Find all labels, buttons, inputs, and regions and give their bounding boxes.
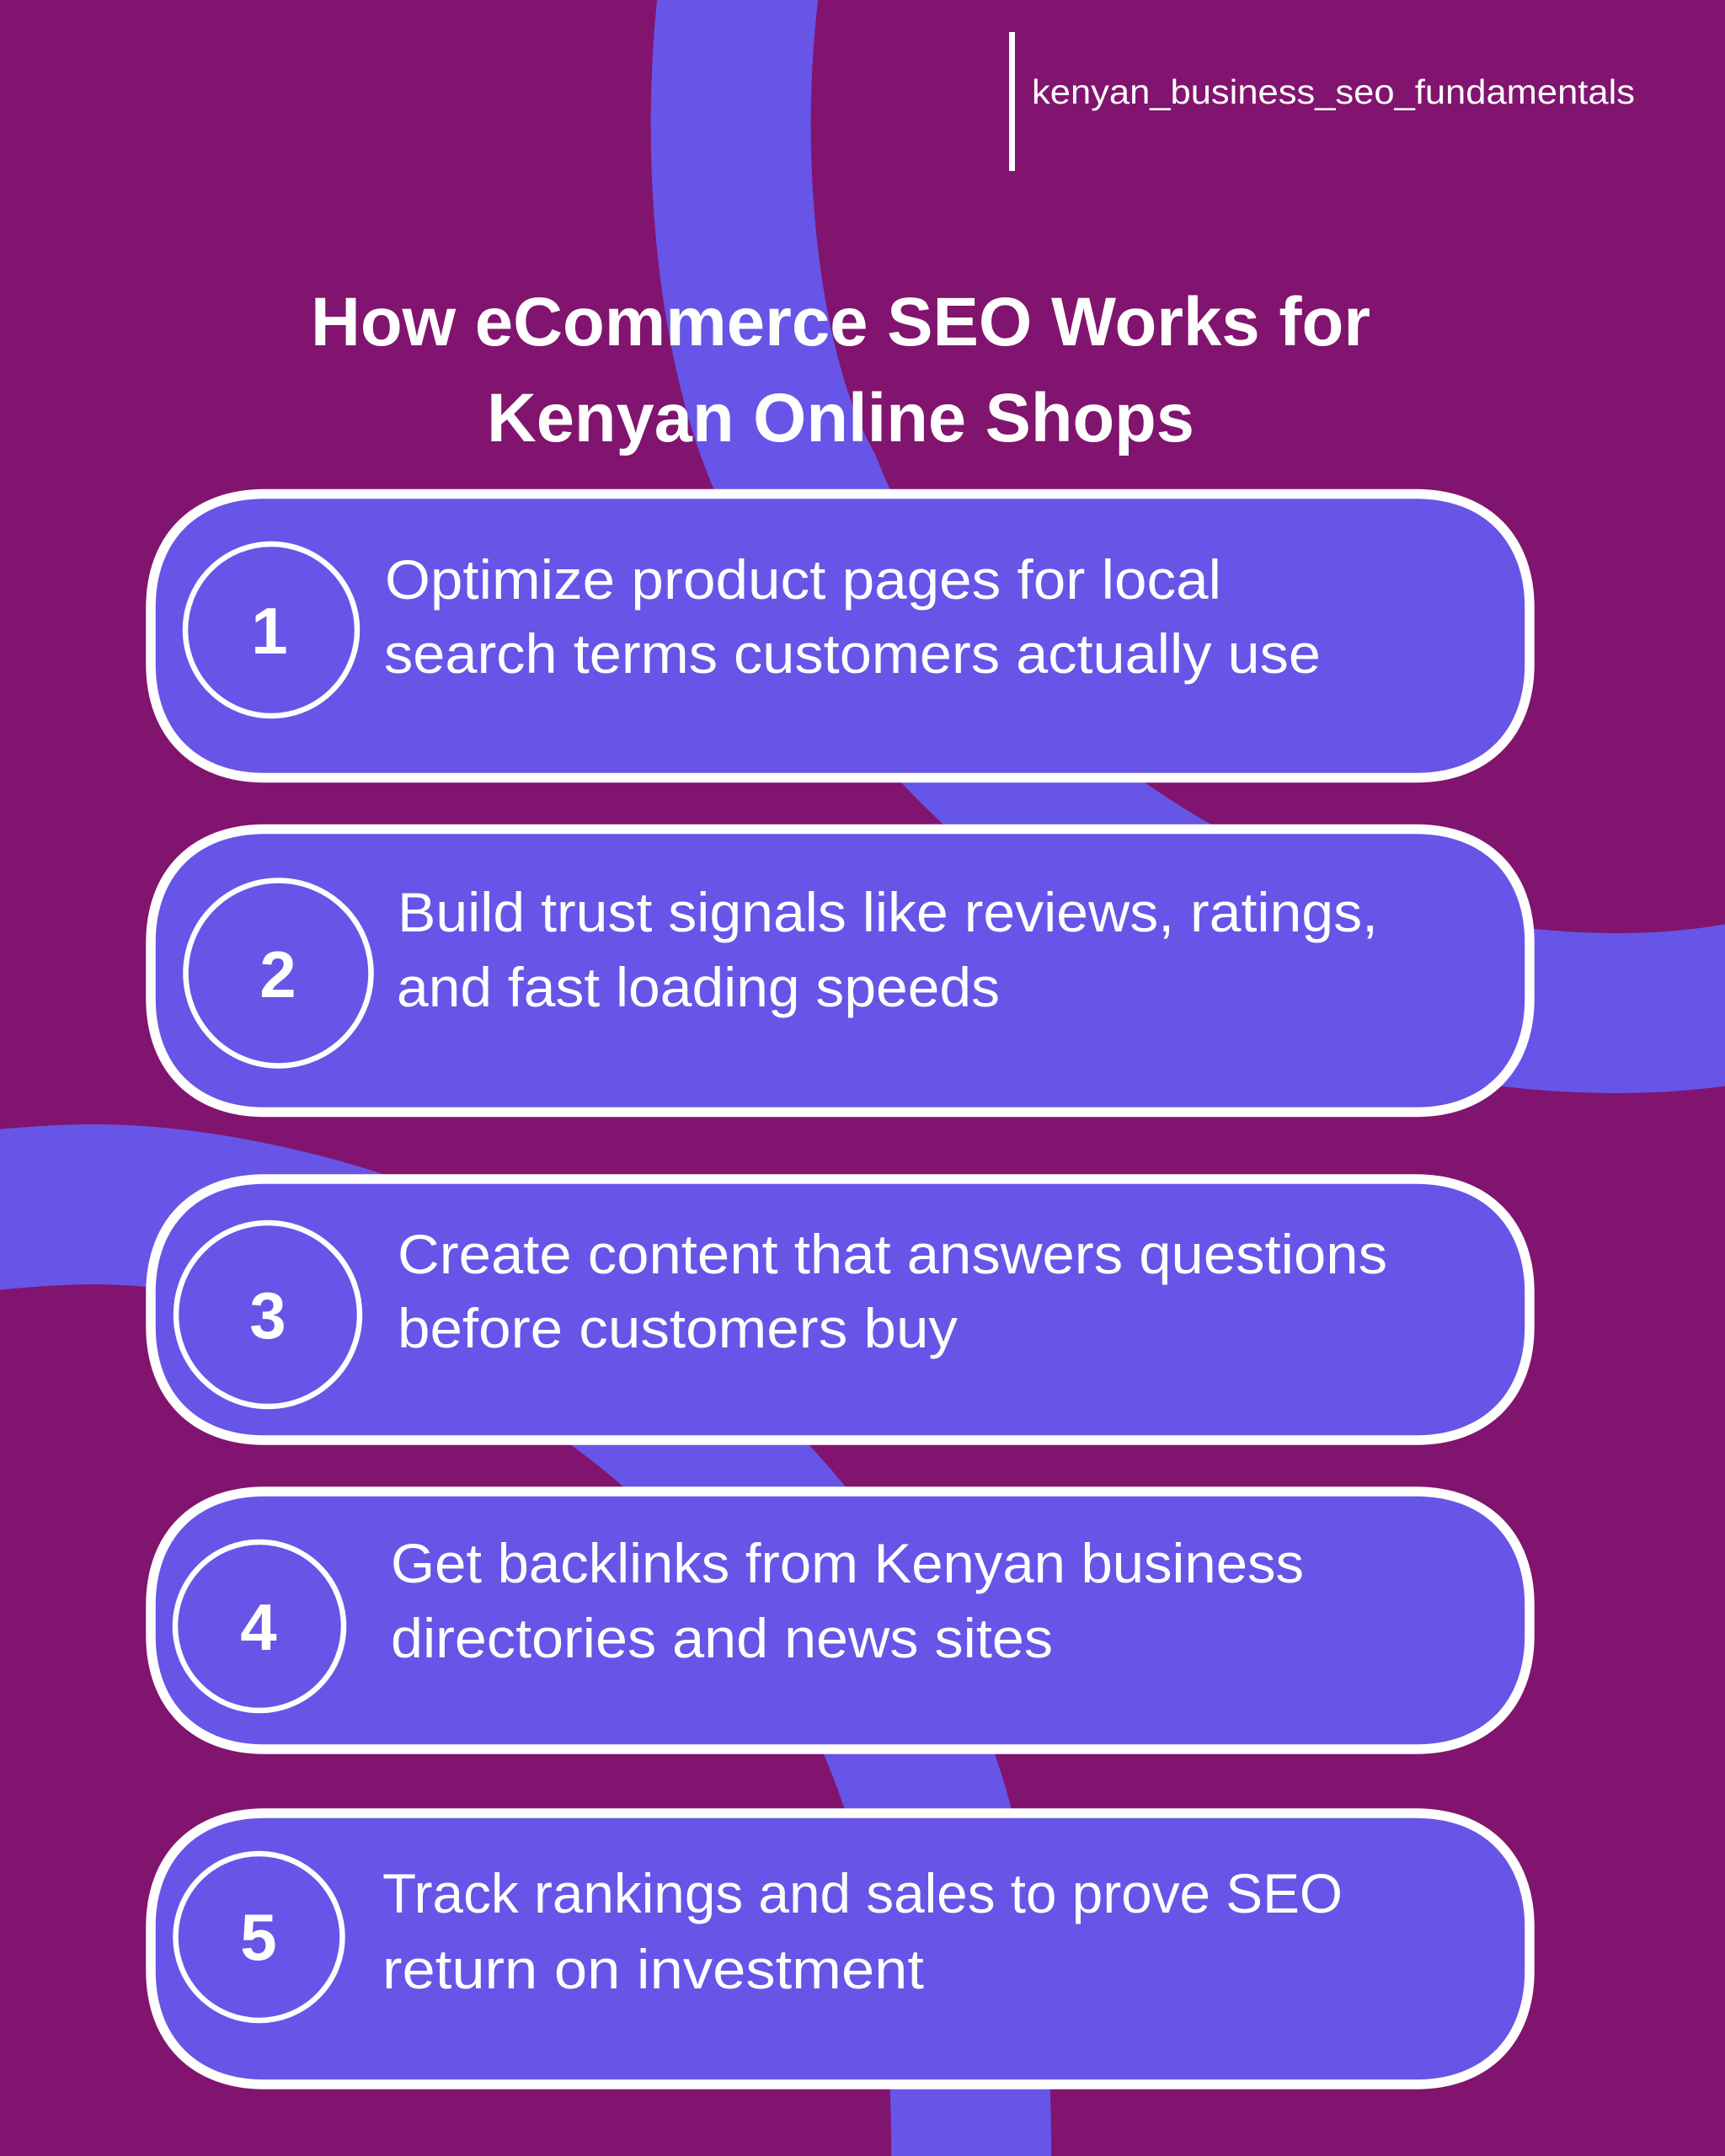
title: How eCommerce SEO Works for (311, 284, 1370, 360)
lower background ribbon (0, 1204, 971, 2156)
step 1 text: Optimize product pages for local (385, 548, 1221, 611)
step 3 text: Create content that answers questions (398, 1223, 1387, 1285)
step 1 number badge (185, 544, 357, 716)
title: Kenyan Online Shops (487, 380, 1194, 456)
step 3 number badge (176, 1223, 360, 1406)
step 3 text (398, 1223, 1387, 1359)
step 5 number badge (175, 1854, 342, 2020)
step 3 number badge: 3 (249, 1278, 286, 1353)
step 4 number badge: 4 (240, 1590, 277, 1664)
step 2 text: Build trust signals like reviews, ratings, (398, 881, 1378, 943)
step 3 text: before customers buy (398, 1297, 958, 1359)
step 4 card (151, 1492, 1530, 1749)
step 4 text: Get backlinks from Kenyan business (391, 1532, 1304, 1594)
step 3 card (151, 1179, 1530, 1440)
step 5 card (151, 1813, 1530, 2084)
step 2 number badge (185, 881, 371, 1066)
step 5 text: return on investment (382, 1938, 924, 2000)
upper background ribbon (731, 0, 1725, 1013)
title (311, 284, 1370, 456)
account handle with divider (1009, 32, 1635, 171)
step 2 text (397, 881, 1378, 1018)
step 1 number badge: 1 (251, 594, 288, 668)
step 4 number badge (175, 1542, 344, 1710)
step 1 text (384, 548, 1321, 685)
step 5 number badge: 5 (240, 1900, 277, 1974)
step 1 text: search terms customers actually use (384, 622, 1321, 685)
step 4 text (391, 1532, 1304, 1669)
step 4 text: directories and news sites (391, 1607, 1053, 1669)
step 2 number badge: 2 (259, 937, 296, 1011)
account handle with divider: kenyan_business_seo_fundamentals (1032, 72, 1635, 111)
step 2 text: and fast loading speeds (397, 956, 1000, 1018)
step 5 text (382, 1862, 1343, 2000)
step 5 text: Track rankings and sales to prove SEO (382, 1862, 1343, 1924)
step 2 card (151, 829, 1530, 1112)
step 1 card (151, 494, 1530, 778)
